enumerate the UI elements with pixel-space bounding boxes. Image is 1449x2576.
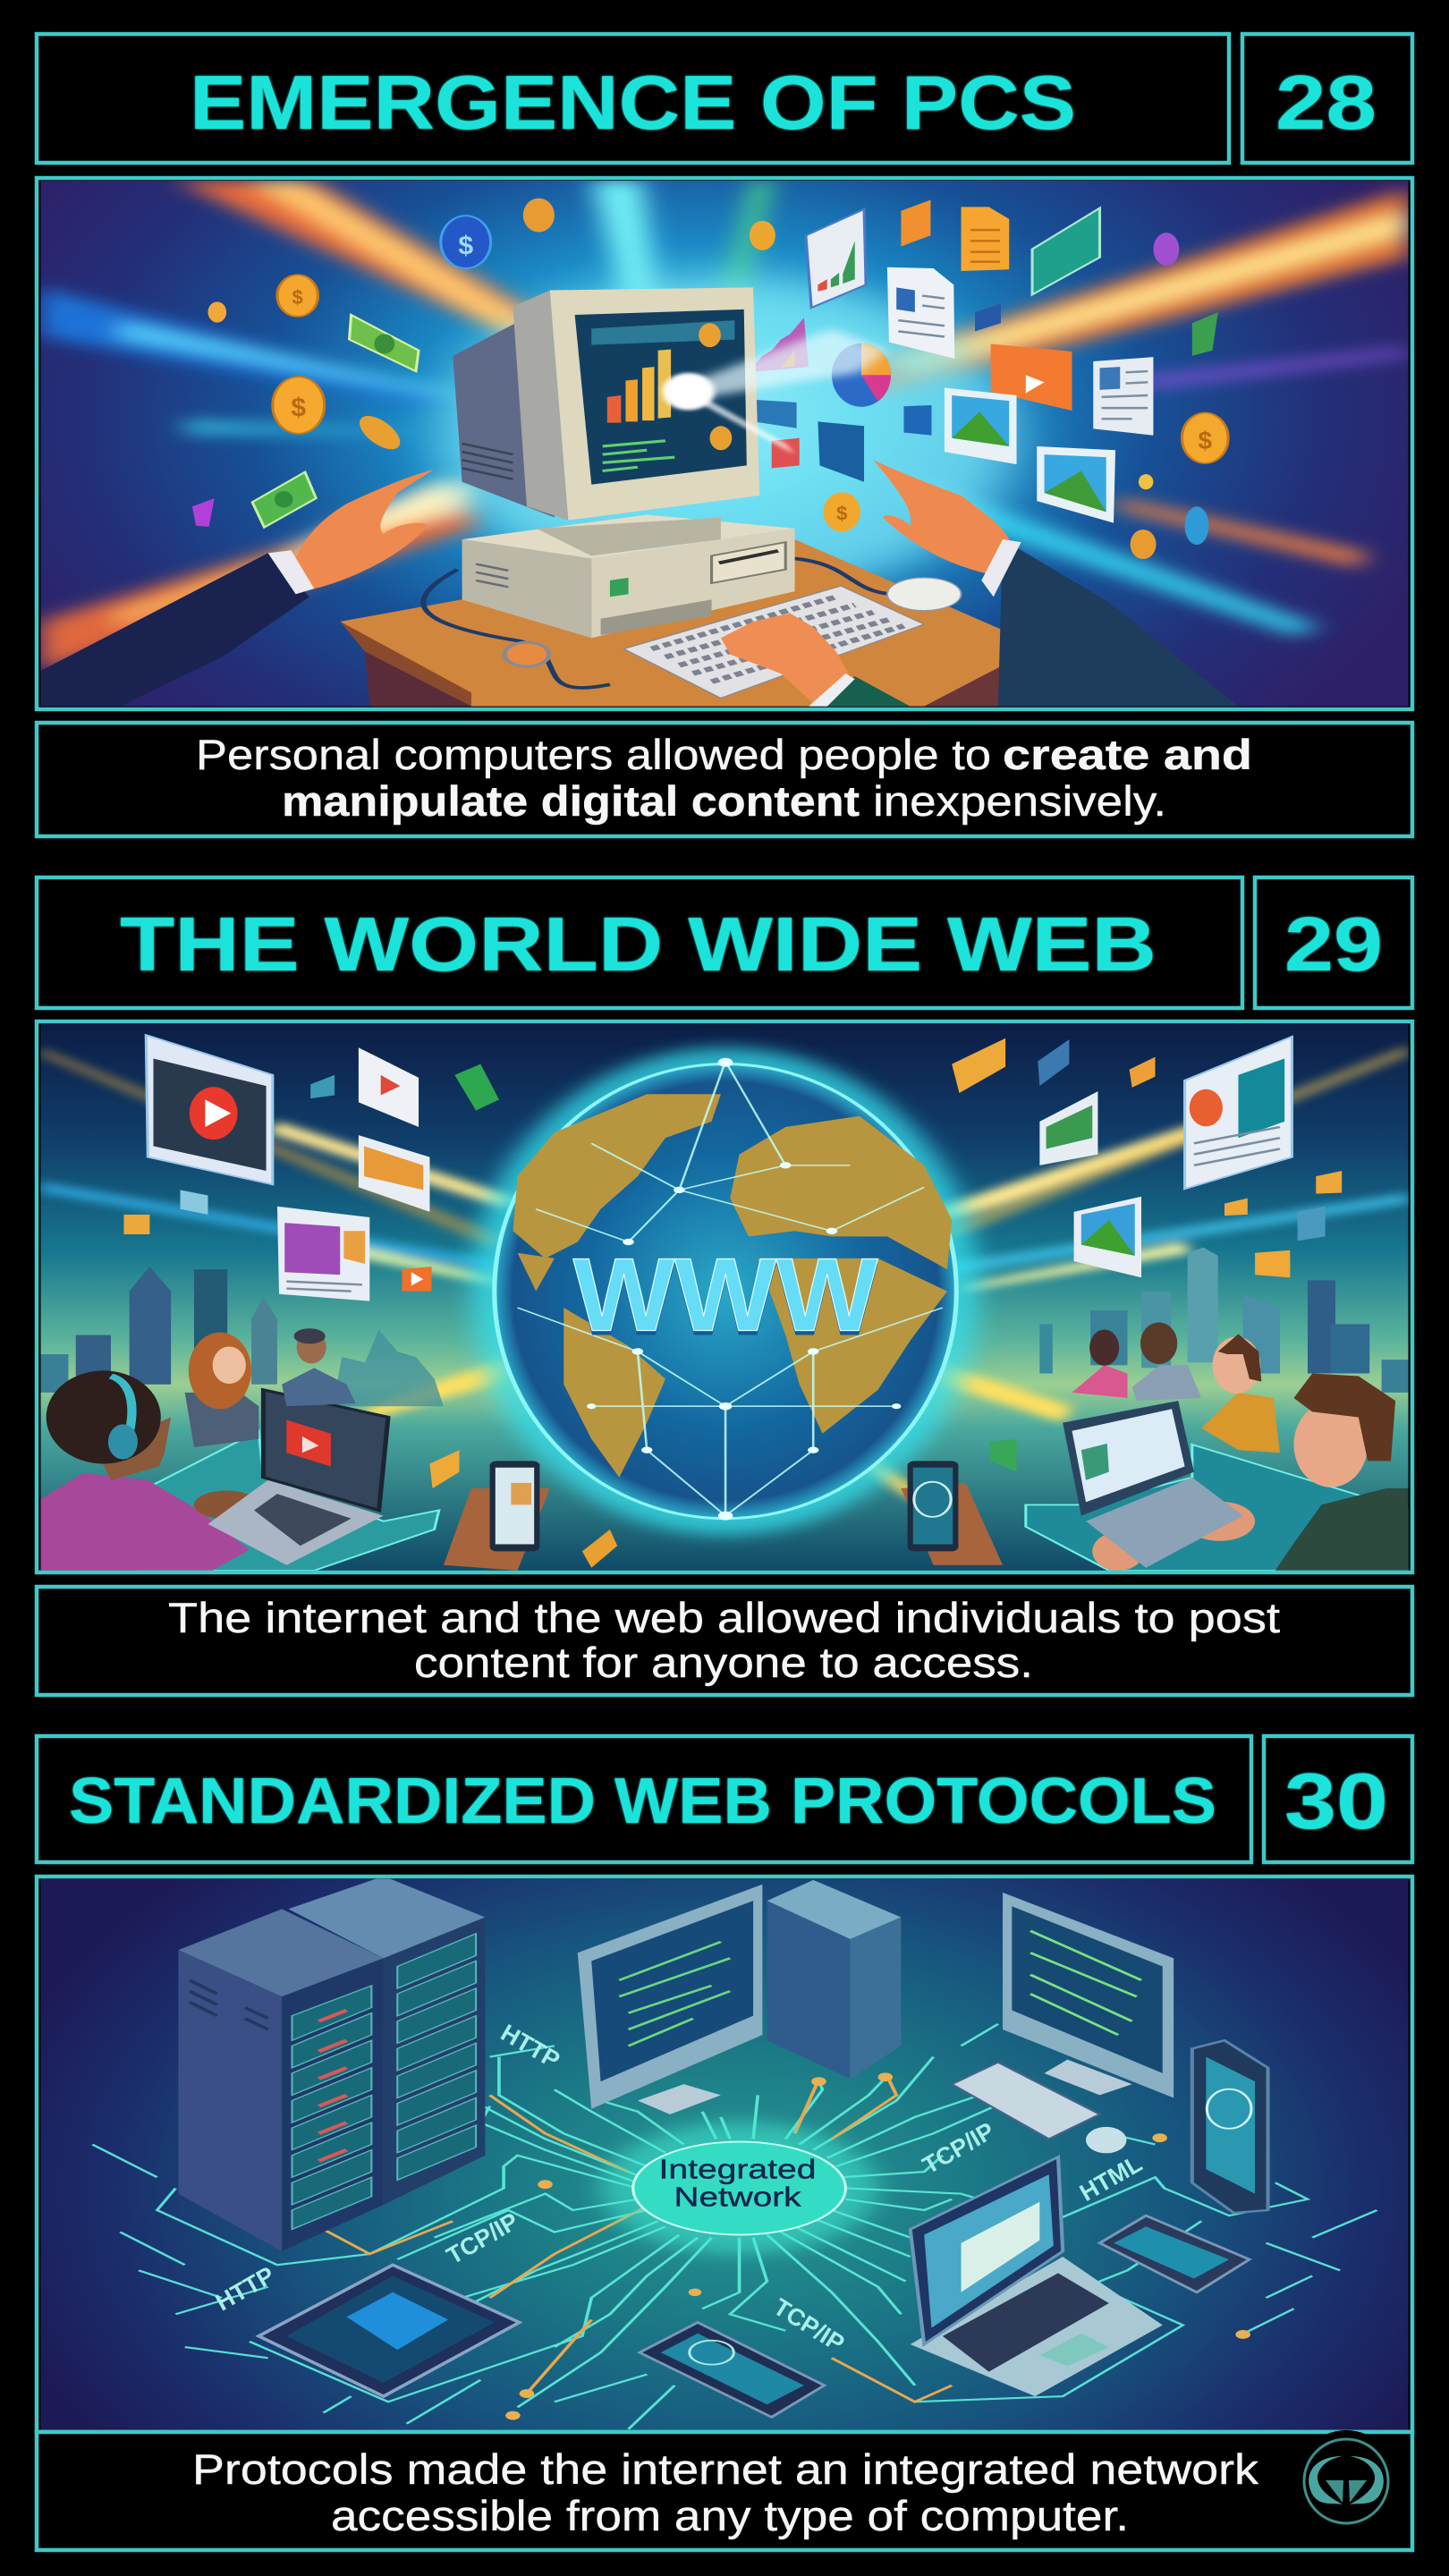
illustration frame — [37, 1877, 1412, 2432]
circuit traces — [92, 2024, 1377, 2429]
caption box: content for anyone to access. — [414, 1639, 1033, 1686]
right pointing hand and sleeve — [873, 460, 1238, 707]
caption box: Protocols made the internet an integrated network — [192, 2445, 1259, 2493]
desks — [124, 1431, 1409, 1571]
background people right — [1072, 1323, 1280, 1453]
coins: $ — [1198, 427, 1213, 454]
WWW lettering — [573, 1237, 878, 1358]
monitor — [453, 287, 759, 555]
illustration: devices joined into an integrated network — [40, 1877, 1409, 2432]
section 29: world wide web — [37, 877, 1412, 1695]
illustration: retro PC with digital content bursting out — [40, 181, 1409, 707]
title box: STANDARDIZED WEB PROTOCOLS — [69, 1766, 1216, 1837]
protocol labels: HTTP — [496, 2019, 564, 2074]
title box — [37, 34, 1229, 163]
streaks — [40, 1045, 1409, 1499]
caption box: The internet and the web allowed individuals to post — [168, 1594, 1280, 1641]
caption box: manipulate digital content — [282, 777, 860, 825]
web windows left — [123, 1035, 499, 1301]
protocol labels: TCP/IP — [918, 2117, 999, 2179]
number box — [1264, 1736, 1412, 1862]
phone bottom — [640, 2322, 825, 2417]
phone right — [1192, 2040, 1268, 2213]
dollar bills — [252, 315, 419, 528]
hand on keyboard — [721, 614, 911, 707]
globe — [471, 1047, 979, 1535]
section 28: emergence of PCs — [37, 34, 1412, 836]
left phone in hand — [444, 1461, 550, 1571]
mouse — [887, 578, 962, 611]
integrated network hub — [601, 2123, 878, 2254]
caption box — [37, 723, 1412, 836]
laptop — [911, 2157, 1163, 2396]
protocol labels: HTTP — [211, 2261, 279, 2316]
network lines — [518, 1062, 943, 1516]
caption box: Personal computers allowed people to — [196, 731, 991, 778]
coins: $ — [458, 232, 473, 261]
coins — [208, 199, 1228, 559]
caption box — [37, 1587, 1412, 1695]
left student with headset — [40, 1370, 291, 1571]
screen flash — [663, 328, 887, 454]
right laptop — [1063, 1401, 1243, 1568]
central monitor — [578, 1885, 762, 2114]
protocol labels — [211, 2019, 1147, 2357]
right monitor — [1003, 1893, 1174, 2097]
tablet with chip — [258, 2265, 520, 2396]
web windows right — [952, 1037, 1342, 1277]
number box — [1255, 877, 1412, 1008]
illustration: globe, web windows and people online — [40, 1024, 1409, 1571]
right man — [1092, 1373, 1409, 1571]
protocol labels: HTML — [1075, 2150, 1147, 2207]
caption box: inexpensively. — [873, 777, 1166, 825]
computer base unit — [462, 514, 795, 638]
cables — [423, 558, 892, 688]
coins: $ — [292, 286, 303, 309]
city skyline right — [1039, 1248, 1409, 1393]
left laptop — [208, 1390, 388, 1565]
title box: THE WORLD WIDE WEB — [120, 902, 1157, 987]
left pointing hand and sleeve — [40, 470, 435, 707]
title box — [37, 1736, 1251, 1862]
caption box — [37, 2432, 1412, 2550]
integrated network hub: Network — [674, 2182, 801, 2213]
title box — [37, 877, 1242, 1008]
integrated network hub: Integrated — [658, 2153, 817, 2184]
server racks — [178, 1877, 485, 2251]
number box — [1242, 34, 1412, 163]
coins: $ — [291, 393, 306, 422]
protocol labels: TCP/IP — [769, 2293, 849, 2357]
small tablet right — [1100, 2216, 1250, 2292]
keyboard — [623, 586, 924, 699]
number box: 29 — [1284, 902, 1383, 987]
illustration frame — [37, 1021, 1412, 1572]
keyboard and mouse — [952, 2063, 1126, 2153]
continents — [513, 1094, 952, 1478]
caption box: accessible from any type of computer. — [331, 2492, 1129, 2539]
light rays — [40, 181, 1409, 671]
coins: $ — [836, 503, 847, 525]
floating documents and media — [192, 199, 1218, 545]
background people left — [185, 1328, 356, 1447]
protocol labels: TCP/IP — [442, 2207, 523, 2269]
network nodes — [587, 1058, 901, 1521]
section 30: standardized web protocols — [37, 1736, 1412, 2550]
WWW lettering: WWW — [573, 1237, 878, 1353]
logo badge — [1295, 2430, 1397, 2532]
title box: EMERGENCE OF PCS — [190, 61, 1076, 146]
city skyline left — [40, 1267, 444, 1406]
desk — [340, 539, 1039, 707]
number box: 30 — [1284, 1757, 1388, 1845]
right phone in hand — [901, 1461, 1003, 1565]
tower — [767, 1880, 901, 2079]
small icons low — [429, 1439, 1017, 1568]
number box: 28 — [1275, 61, 1377, 146]
WWW lettering: WWW — [573, 1241, 878, 1358]
caption box: create and — [1003, 731, 1252, 778]
node dots — [505, 2072, 1250, 2419]
illustration frame — [37, 178, 1412, 709]
